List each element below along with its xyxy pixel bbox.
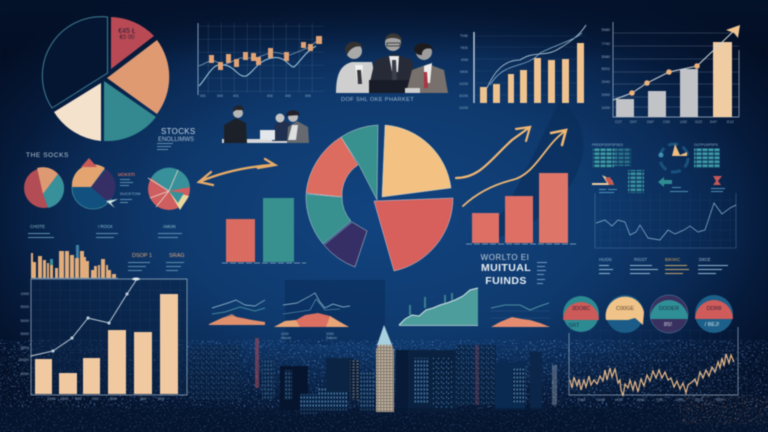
chart: top bars with lines: KIN — [461, 57, 468, 62]
small caption cluster: I ROCK — [98, 224, 113, 229]
circle stat 2 — [606, 295, 644, 333]
chart: top right bars with trend arrow: 5980 — [602, 28, 610, 32]
area chart 1 — [209, 300, 265, 325]
circle stat 4: DDR8 — [707, 306, 721, 312]
small pie 2 with arrow — [72, 158, 118, 209]
side notes — [537, 262, 547, 284]
slice: cream wedge — [382, 125, 451, 197]
chart: top right bars with trend arrow: 2040 — [602, 80, 610, 84]
chart: top right bars with trend arrow: 2000 — [602, 93, 610, 97]
laptop — [369, 80, 411, 93]
chart: bottom left bars and line: 5000 — [21, 305, 29, 309]
pie slice: outlined navy — [42, 17, 108, 108]
small pie 1 — [24, 167, 64, 208]
chart: bottom right price line: T042 — [577, 398, 586, 402]
heading: mutual funds: MUITUAL — [481, 262, 531, 274]
arrow: gold rising long — [463, 130, 566, 206]
chart: bottom left bars and line: 1000 — [60, 397, 68, 401]
chart: candlestick: 401 — [233, 94, 239, 98]
small legend: UCKSTI — [118, 172, 135, 177]
captions under line chart: RIGST — [634, 257, 648, 262]
chart: candlestick: 400 — [267, 94, 273, 98]
chart: top right bars with trend arrow: G22 — [695, 120, 702, 124]
chart: bottom left bars and line: 5000 — [21, 319, 29, 323]
chart: bottom left bars and line: 600 — [158, 397, 164, 401]
chart: bottom left bars and line: 500 — [75, 397, 81, 401]
area chart 2: discon — [281, 336, 291, 340]
small caption cluster: CHOTE — [30, 224, 45, 229]
chart: top right bars with trend arrow: 5001 — [602, 67, 610, 71]
photo: working at laptop — [222, 105, 309, 143]
chart: bottom right price line: DC1 — [695, 398, 703, 402]
small caption cluster: AMUN — [163, 224, 176, 229]
chart: top right bars with trend arrow: C27 — [615, 120, 622, 124]
city skyline — [0, 338, 768, 432]
pie slice: red — [111, 17, 154, 69]
chart: bottom right price line: DHC — [637, 398, 645, 402]
circle stat 3: 8S! — [664, 322, 673, 328]
person left — [336, 42, 374, 93]
chart: histogram — [31, 245, 118, 278]
slice: purple — [324, 222, 367, 267]
slice: teal top — [341, 125, 378, 200]
chart: top bars with lines: THE — [460, 33, 468, 38]
chart: candlestick: 004 — [217, 94, 223, 98]
chart: bottom right price line: SOT — [716, 398, 724, 402]
chart: bottom right price line: T0S — [656, 398, 663, 402]
tables and icons panel — [592, 143, 725, 193]
slice: red left — [306, 137, 358, 197]
area chart 3 — [399, 288, 478, 326]
chart: bottom right price line — [569, 327, 738, 402]
ring icon — [660, 144, 688, 172]
chart: bottom left bars and line: 10000 — [18, 358, 29, 362]
area chart 2: 1100 — [281, 332, 289, 336]
captions under line chart: BIKIIKC — [665, 257, 680, 262]
area chart 2: Saleon — [326, 336, 337, 340]
area chart 2: 1000 — [326, 332, 334, 336]
tables and icons panel: PRDDPSDPSPSES — [592, 143, 624, 147]
person right — [405, 43, 448, 93]
chart: candlestick: 400 — [285, 94, 291, 98]
bar chart: center left — [222, 198, 306, 263]
small icons — [592, 175, 614, 185]
heading: stocks: ENOLLIMWS — [158, 137, 194, 143]
chart: bottom right price line: HOT — [615, 398, 624, 402]
chart: bottom left bars and line: 5000 — [21, 332, 29, 336]
panel: large pie chart — [42, 17, 169, 141]
chart: bottom left bars and line: 8000 — [21, 372, 29, 376]
chart: candlestick — [198, 23, 324, 98]
pie label: €45 Ł — [118, 28, 136, 35]
circle stat 3 — [650, 295, 688, 333]
circle stat 1: 3DO8C — [572, 306, 590, 312]
heading: stocks: STOCKS — [161, 127, 196, 136]
circle stat 4: / BEJ! — [705, 322, 720, 328]
circle stat 3: DOOER — [659, 306, 679, 312]
arrowhead — [726, 25, 740, 38]
pie slice: cream — [54, 83, 101, 141]
chart: bottom left bars and line: 500 — [110, 397, 116, 401]
chart: top bars with lines: UOS — [459, 105, 468, 110]
photo: three business people — [336, 33, 448, 93]
tables and icons panel: OUTPUSPSPS — [694, 143, 719, 147]
chart: top right bars with trend arrow: 7740 — [602, 42, 610, 46]
chart: bottom left bars and line — [18, 278, 187, 401]
chart: bottom left bars and line: 5000 — [21, 346, 29, 350]
circle stat 1 — [563, 296, 599, 332]
pie slice: orange — [107, 40, 169, 114]
small caption cluster — [28, 224, 185, 271]
chart: bottom left bars and line: 700 — [92, 397, 98, 401]
heading: mutual funds: WORLTO EI — [481, 253, 529, 262]
skyline central tower — [376, 325, 394, 412]
arrow: gold rising short — [456, 127, 530, 178]
chart: top right bars with trend arrow — [602, 22, 740, 124]
captions under line chart: HUGN — [599, 257, 612, 262]
captions under line chart: DIICE — [699, 257, 711, 262]
chart: top right bars with trend arrow: D87 — [647, 120, 654, 124]
chart: top right bars with trend arrow: U32 — [680, 120, 687, 124]
circle stat 2: C00GE — [616, 306, 634, 312]
chart: top bars with lines: UOS — [459, 81, 468, 86]
small caption cluster: DSOP 1 — [132, 253, 152, 259]
slice: red lower wedge — [374, 198, 453, 271]
small caption cluster: SRAG — [169, 253, 185, 259]
chart: top right bars with trend arrow: D07 — [630, 120, 637, 124]
arrow: gold left arrow — [199, 159, 275, 185]
heading: mutual funds: FUINDS — [485, 275, 527, 287]
pie slice: teal — [104, 81, 156, 141]
small pie 3 — [148, 168, 190, 210]
slice: teal lower — [306, 194, 351, 244]
arrow icon — [658, 177, 672, 187]
chart: bottom right price line: DH5 — [597, 398, 605, 402]
chart: candlestick: 001 — [200, 94, 206, 98]
panel: large pie chart: €0 00 — [119, 35, 135, 41]
chart: top right bars with trend arrow: D47 — [710, 120, 717, 124]
small legend — [118, 172, 141, 203]
chart: bottom left bars and line: 1000 — [21, 292, 29, 296]
chart: top bars with lines: DOS — [459, 93, 468, 98]
area chart 2 — [274, 293, 350, 340]
photo caption: DOF SHL OKE PHARKET — [341, 97, 414, 103]
heading: the stocks: THE SOCKS — [26, 152, 69, 159]
chart: top right bars with trend arrow: E12 — [727, 120, 734, 124]
heading: stocks — [157, 127, 196, 150]
chart: top bars with lines — [459, 25, 586, 110]
chart: top bars with lines: TEE — [460, 45, 468, 50]
circle stat 1: SRT — [569, 323, 580, 329]
captions under line chart — [599, 257, 728, 274]
chart: top bars with lines: KKK — [460, 69, 468, 74]
chart: top right bars with trend arrow: 1000 — [602, 106, 610, 110]
chart: bottom right price line: UHC — [676, 398, 684, 402]
person middle — [370, 33, 416, 82]
area chart 4 — [491, 303, 550, 327]
chart: bottom left bars and line: 400 — [140, 397, 146, 401]
small legend: DUCKTOW — [120, 191, 141, 196]
heading: mutual funds — [481, 253, 531, 287]
chart: candlestick: 400 — [305, 94, 311, 98]
chart: top right bars with trend arrow: C92 — [663, 120, 670, 124]
bar chart: center right — [466, 173, 576, 244]
panel: central donut pie — [306, 125, 453, 271]
chart: top right bars with trend arrow: 5080 — [602, 55, 610, 59]
chart: middle right line — [595, 193, 736, 248]
chart: bottom left bars and line: 1000 — [47, 397, 55, 401]
circle stat 4 — [695, 295, 733, 333]
